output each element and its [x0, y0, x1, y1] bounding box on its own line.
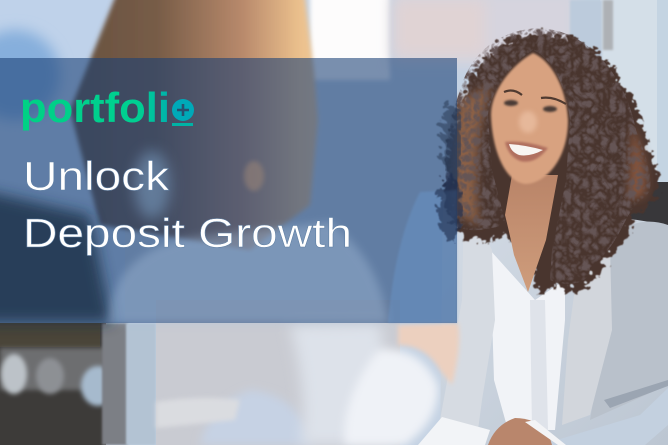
- foreground person: blurred back and sleeve: [156, 300, 438, 445]
- translucent blue panel: [0, 58, 457, 323]
- panel shading: darker left and person shapes: [0, 98, 459, 323]
- title: Deposit Growth: [23, 210, 352, 256]
- title: [23, 153, 352, 256]
- woman: neck: [505, 175, 558, 292]
- smile: [505, 142, 548, 162]
- woman: hair: [440, 28, 653, 288]
- foreground person: hair: [70, 0, 318, 250]
- logo: portfolio+: portfoli: [20, 84, 170, 131]
- logo mark: plus in circle: [172, 99, 194, 126]
- handshake hand: [398, 323, 459, 385]
- bottom-left dark blurred area: [0, 323, 156, 445]
- blouse: [490, 250, 565, 430]
- woman: face: [491, 53, 568, 184]
- woman: hair curl texture: [445, 28, 650, 284]
- lapels: [440, 195, 495, 430]
- eyebrows: [504, 91, 566, 104]
- title: Unlock: [23, 153, 170, 199]
- eyes: [504, 100, 557, 112]
- woman: jacket: [440, 190, 668, 445]
- woman: warm hair highlights: [453, 85, 646, 226]
- woman: hand and paper on desk: [418, 417, 566, 445]
